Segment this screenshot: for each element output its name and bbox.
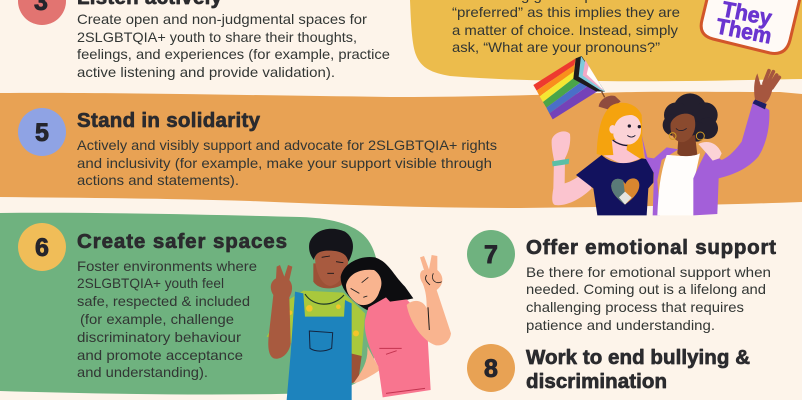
illustration: two friends with pride flag — [533, 56, 779, 215]
badge: number 8: 8 — [484, 355, 498, 383]
panel: step 3 listen actively — [18, 0, 390, 80]
text: safer spaces description: and promote acceptance — [77, 347, 243, 363]
text: safer spaces description: and understanding). — [77, 364, 208, 380]
badge: number 3 — [18, 0, 66, 25]
text: safer spaces description: safe, respected & included — [77, 293, 250, 309]
panel: step 8 end bullying — [467, 344, 750, 393]
text: pronouns description: ask, “What are your pronouns?” — [452, 39, 660, 55]
text: safer spaces description: 2SLGBTQIA+ youth feel — [77, 275, 224, 291]
text: safer spaces description — [77, 258, 257, 380]
text: pronouns description: a matter of choice. Instead, simply — [452, 22, 678, 38]
text: solidarity description — [77, 137, 497, 188]
text: emotional support description: patience and understanding. — [526, 317, 715, 333]
icon: peace hand right — [407, 255, 451, 345]
badge: number 6 — [18, 223, 66, 271]
text: listen description — [77, 11, 390, 80]
icon: rainbow heart on shirt — [611, 178, 639, 205]
figure: person in pink top — [341, 255, 451, 397]
text: emotional support description — [526, 264, 771, 333]
text: solidarity description: Actively and visibly support and advocate for 2SLGBTQIA+ rights — [77, 137, 497, 153]
icon: they them pronoun sign: Them — [714, 13, 774, 49]
panel: step 4 pronouns — [410, 0, 802, 81]
heading: stand in solidarity: Stand in solidarity — [77, 109, 261, 132]
heading: work to end bullying and discrimination: discrimination — [526, 370, 667, 393]
icon: progress pride flag — [533, 56, 605, 119]
text: pronouns description — [452, 0, 680, 55]
badge: number 8 — [467, 344, 515, 392]
text: safer spaces description: discriminatory behaviour — [77, 329, 241, 345]
badge: number 6: 6 — [35, 234, 49, 262]
illustration: two friends making peace signs — [267, 229, 451, 400]
panel: step 7 offer emotional support — [467, 230, 776, 333]
icon: they them pronoun sign — [701, 0, 802, 53]
heading: create safer spaces: Create safer spaces — [77, 230, 287, 253]
badge: number 7 — [467, 230, 515, 278]
text: emotional support description: needed. Coming out is a lifelong and — [526, 281, 766, 297]
text: listen description: feelings, and experiences (for example, practice — [77, 46, 390, 62]
text: pronouns description: “preferred” as this implies they are — [452, 4, 680, 20]
icon: raised hand — [754, 71, 779, 103]
text: solidarity description: actions and statements). — [77, 172, 239, 188]
text: emotional support description: Be there for emotional support when — [526, 264, 771, 280]
figure: blonde person in navy shirt — [552, 96, 654, 215]
text: listen description: 2SLGBTQIA+ youth to share their thoughts, — [77, 29, 357, 45]
badge: number 5: 5 — [35, 119, 49, 147]
heading: work to end bullying and discrimination — [526, 346, 750, 393]
badge: number 5 — [18, 108, 66, 156]
text: safer spaces description: (for example, challenge — [80, 311, 234, 327]
text: listen description: active listening and provide validation). — [77, 64, 335, 80]
panel: step 5 stand in solidarity — [0, 92, 802, 208]
icon: peace hand left — [268, 265, 292, 359]
badge: number 7: 7 — [484, 241, 498, 269]
text: emotional support description: challenging process that requires — [526, 299, 744, 315]
text: safer spaces description: Foster environments where — [77, 258, 257, 274]
text: listen description: Create open and non-judgmental spaces for — [77, 11, 367, 27]
heading: offer emotional support: Offer emotional support — [526, 236, 776, 259]
panel: step 6 create safer spaces — [0, 213, 380, 394]
text: solidarity description: and inclusivity (for example, make your support visible through — [77, 155, 492, 171]
heading: work to end bullying and discrimination: Work to end bullying & — [526, 346, 750, 369]
figure: curly haired person in purple jacket — [642, 71, 779, 215]
figure: person in blue overalls — [267, 229, 365, 400]
